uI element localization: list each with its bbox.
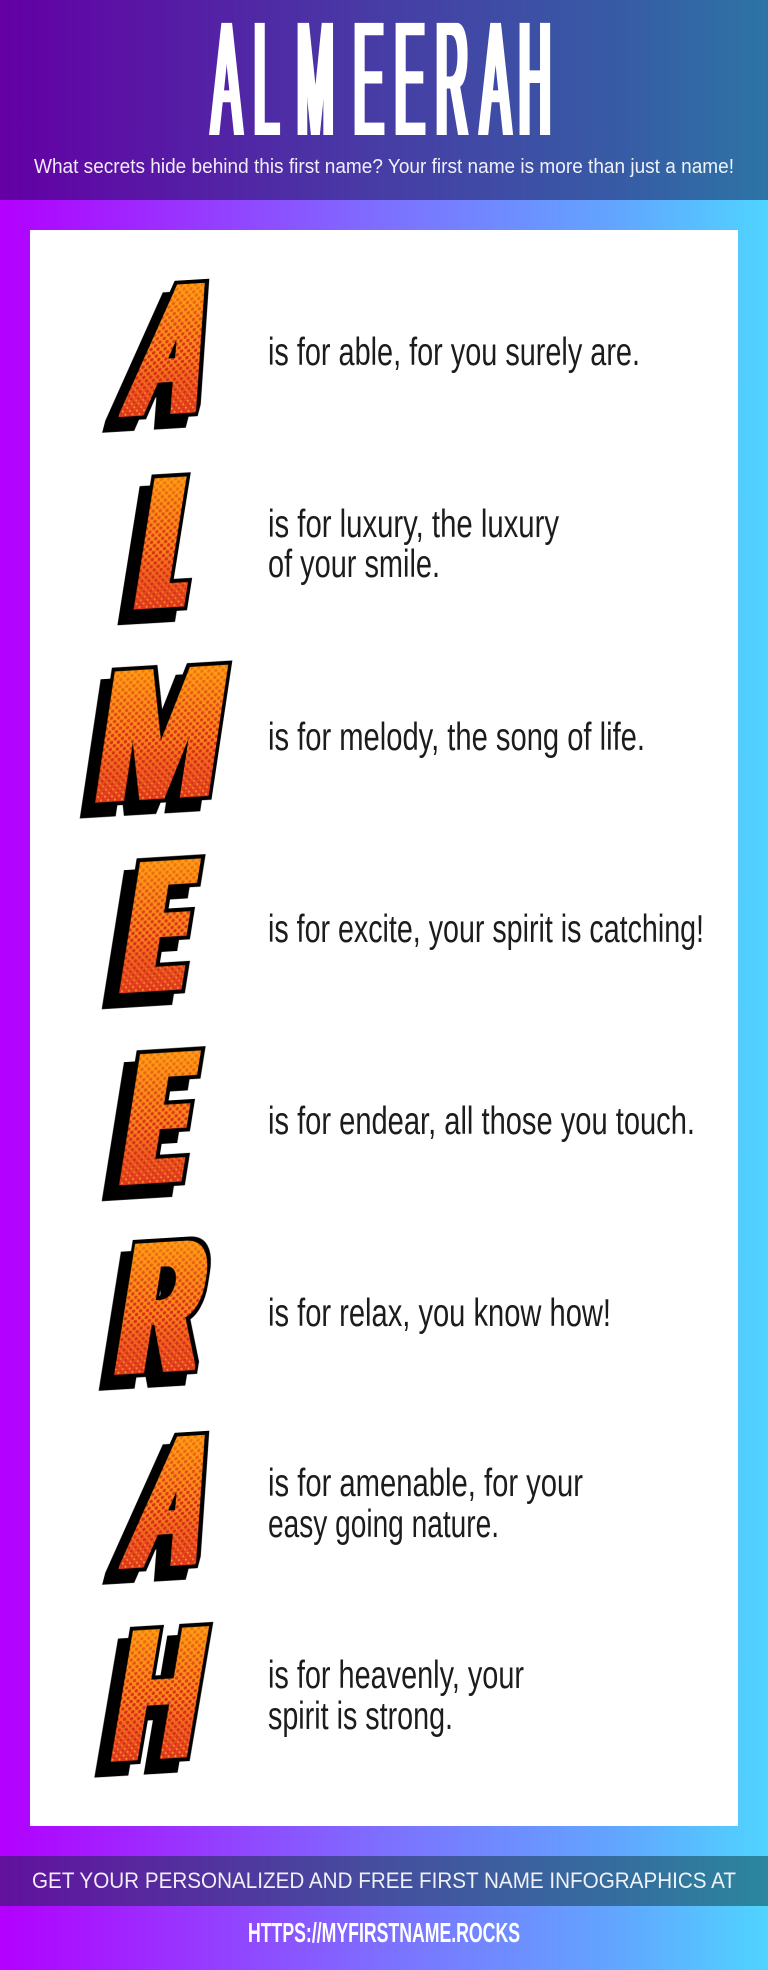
row: M: [80, 660, 642, 819]
icon: comic letter E second: E: [106, 1025, 188, 1235]
icon: comic letter A: A: [100, 255, 224, 467]
icon: comic letter E: [102, 854, 206, 1010]
icon: comic letter E: E: [119, 821, 200, 1031]
text: second A meaning: is for amenable, for your: [268, 1462, 583, 1505]
icon: comic letter R: R: [109, 1202, 216, 1413]
icon: comic letter L: L: [125, 451, 188, 659]
text: H meaning: is for heavenly, your: [268, 1654, 524, 1697]
icon: comic letter H: [94, 1622, 214, 1778]
footer call to action: GET YOUR PERSONALIZED AND FREE FIRST NAME INFOGRAPHICS AT: [32, 1868, 736, 1893]
text: H meaning: spirit is strong.: [268, 1695, 453, 1738]
row: E: [102, 854, 702, 1010]
icon: comic letter A: A: [112, 244, 236, 455]
text: L meaning: is for luxury, the luxury: [268, 503, 559, 546]
row: H: [94, 1622, 524, 1778]
icon: comic letter E: E: [106, 833, 188, 1043]
row: A: [102, 278, 638, 626]
icon: comic letter L: L: [137, 439, 200, 647]
row: L: [117, 472, 559, 626]
icon: comic letter R: [98, 1236, 212, 1392]
icon: comic letter M: [80, 660, 232, 819]
icon: comic letter L: [117, 472, 192, 626]
footer band: [0, 1856, 768, 1906]
text: H meaning: [268, 1654, 524, 1738]
text: R meaning: is for relax, you know how!: [268, 1292, 611, 1335]
icon: comic letter A second: A: [112, 1396, 236, 1607]
icon: comic letter M: M: [85, 626, 239, 840]
row: R: [98, 1236, 608, 1392]
text: M meaning: is for melody, the song of life.: [268, 716, 645, 759]
footer url: HTTPS://MYFIRSTNAME.ROCKS: [248, 1917, 520, 1948]
icon: comic letter R: R: [97, 1214, 205, 1425]
row: second E: [102, 1046, 692, 1202]
text: second A meaning: easy going nature.: [268, 1503, 499, 1546]
text: A meaning: is for able, for you surely are.: [268, 331, 640, 374]
icon: comic letter E second: [102, 1046, 206, 1202]
icon: comic letter A second: [102, 1430, 210, 1585]
text: L meaning: of your smile.: [268, 543, 440, 586]
subtitle: What secrets hide behind this first name? Your first name is more than just a name!: [34, 156, 734, 178]
icon: comic letter H: H: [102, 1587, 218, 1800]
icon: comic letter A second: A: [100, 1407, 224, 1619]
icon: comic letter E second: E: [119, 1013, 200, 1223]
row: second A: [102, 1430, 582, 1585]
icon: comic letter H: H: [90, 1599, 206, 1811]
text: L meaning: [268, 503, 559, 586]
header band: [0, 0, 768, 200]
text: second A meaning: [268, 1462, 583, 1546]
icon: comic letter A: [102, 278, 210, 433]
icon: comic letter M: M: [73, 637, 228, 852]
